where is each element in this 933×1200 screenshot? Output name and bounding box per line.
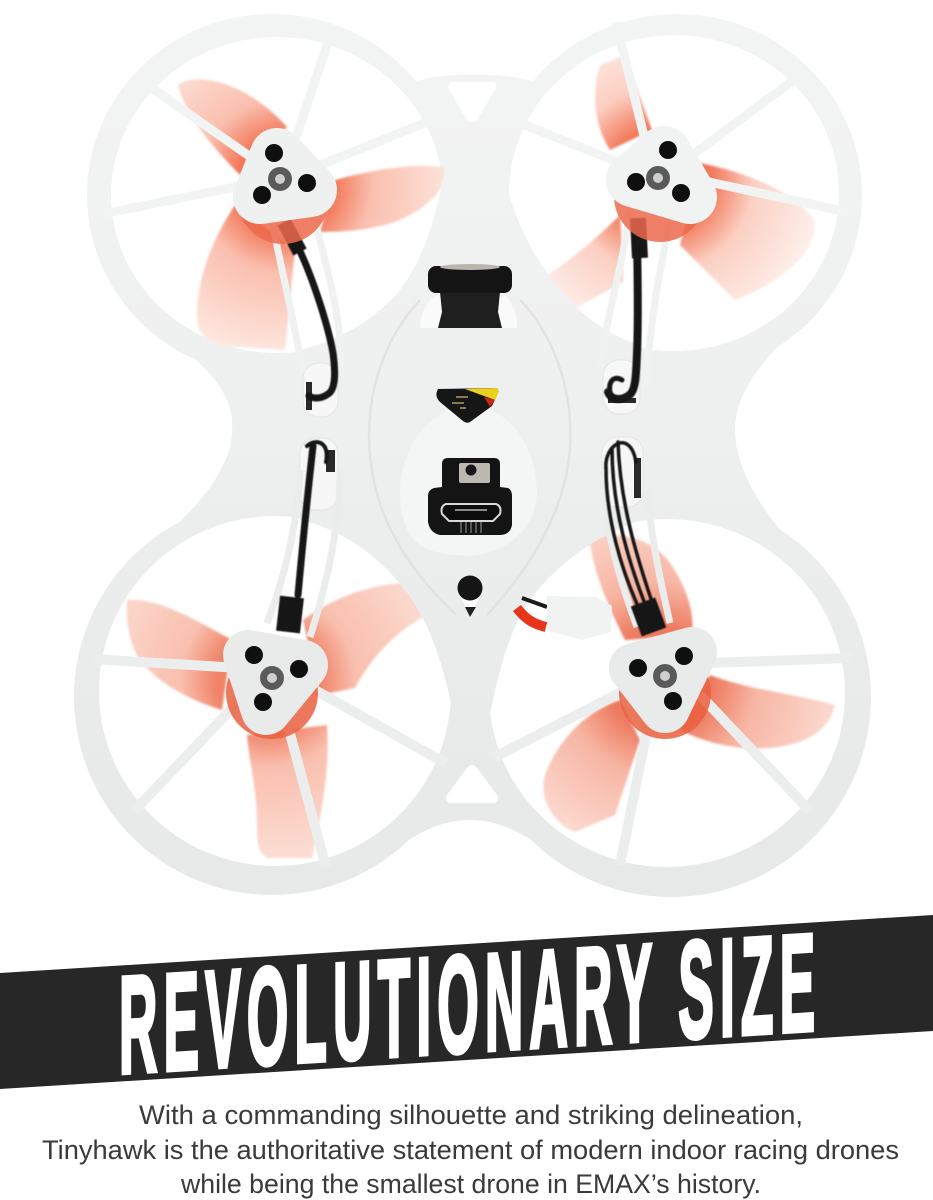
lower battery window (458, 576, 482, 618)
lower rotor guard spokes (92, 658, 852, 867)
propeller bottom right (543, 535, 835, 832)
description text: while being the smallest drone in EMAX’s history. (180, 1169, 761, 1199)
body contour shading (369, 300, 570, 615)
rotor guard openings (99, 35, 845, 867)
title: REVOLUTIONARY SIZE (119, 906, 815, 1103)
central body (300, 82, 640, 803)
lower wire guides (267, 470, 670, 637)
description text: With a commanding silhouette and striking delineation, (139, 1100, 803, 1130)
lens opening (420, 296, 517, 328)
motor bottom right (619, 647, 711, 739)
motor wiring slots (300, 360, 643, 510)
bottom triangle opening (446, 765, 498, 803)
motor bottom left (226, 646, 318, 739)
motor top right (614, 141, 706, 242)
flight controller connector window (436, 388, 498, 423)
title banner (0, 906, 933, 1103)
upper rotor guard spokes (103, 22, 847, 214)
upper wire guides (272, 210, 670, 387)
motor wires (284, 218, 654, 632)
top triangle opening (448, 82, 496, 122)
motor top left (237, 144, 329, 244)
ESC components inside slots (306, 382, 641, 498)
propeller top right (530, 55, 815, 313)
description text: Tinyhawk is the authoritative statement of modern indoor racing drones (42, 1135, 899, 1165)
USB board (428, 458, 512, 535)
battery pocket (400, 405, 537, 556)
micro USB port (442, 504, 500, 533)
propeller bottom left (127, 583, 431, 858)
drone frame silhouette (74, 14, 871, 897)
drone (74, 14, 871, 897)
battery connector and lead (517, 596, 612, 640)
push button (459, 463, 490, 483)
propeller top left (178, 79, 445, 350)
camera (428, 264, 512, 328)
description text (42, 1100, 899, 1199)
banner band (0, 915, 933, 1089)
